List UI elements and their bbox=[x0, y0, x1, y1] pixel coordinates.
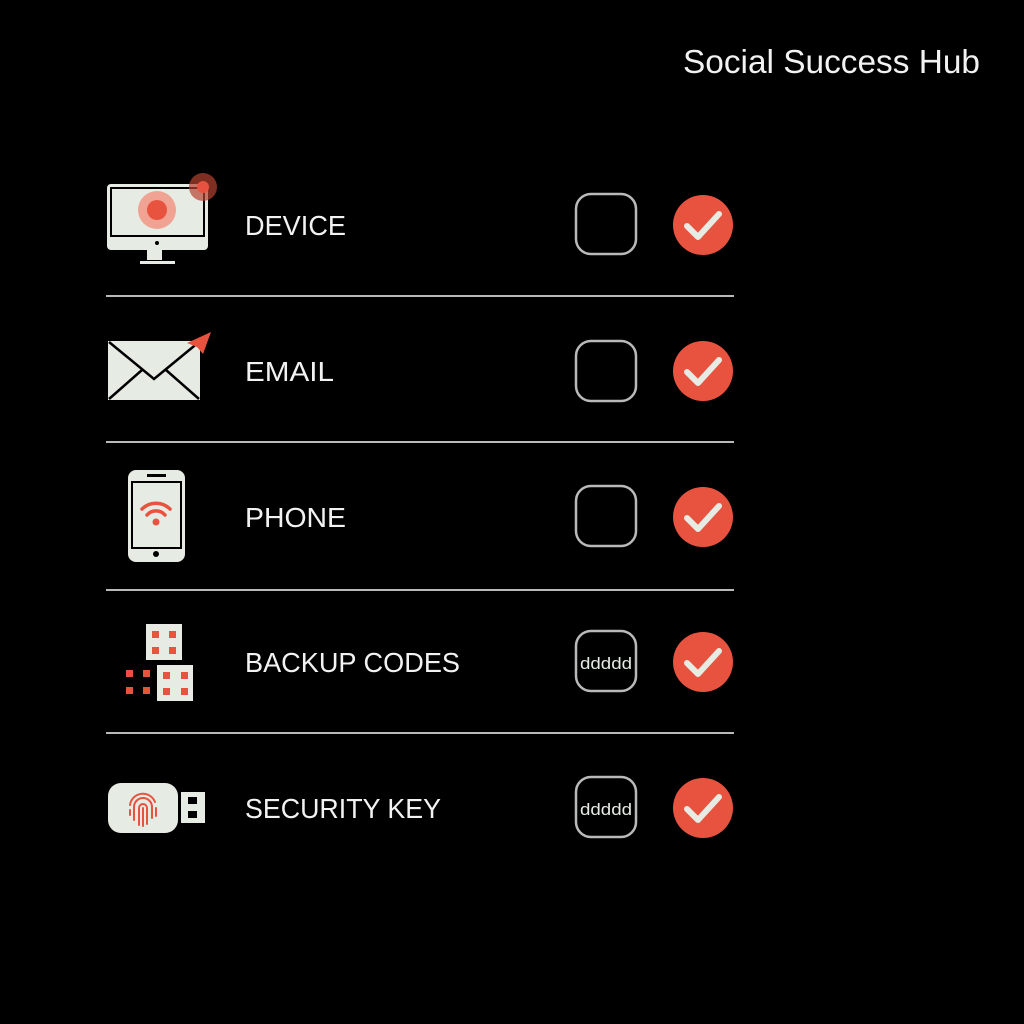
label: backup codes: BACKUP CODES bbox=[245, 647, 460, 678]
title: Social Success Hub bbox=[683, 43, 980, 80]
icon: usb key bbox=[108, 783, 205, 833]
checkbox: phone bbox=[576, 486, 636, 546]
icon: code blocks bbox=[126, 624, 193, 701]
checkbox: device bbox=[576, 194, 636, 254]
row: backup codes bbox=[126, 624, 733, 701]
row: email bbox=[108, 332, 733, 401]
check: backup codes bbox=[673, 632, 733, 692]
icon: phone bbox=[128, 470, 185, 562]
row: device bbox=[107, 173, 733, 264]
icon: monitor bbox=[107, 173, 217, 264]
label: device: DEVICE bbox=[245, 210, 346, 241]
check: phone bbox=[673, 487, 733, 547]
label: phone: PHONE bbox=[245, 502, 346, 533]
checkbox: security key: ddddd bbox=[580, 800, 632, 819]
check: device bbox=[673, 195, 733, 255]
label: security key: SECURITY KEY bbox=[245, 793, 441, 824]
label: email: EMAIL bbox=[245, 356, 334, 387]
checkbox: email bbox=[576, 341, 636, 401]
row: phone bbox=[128, 470, 733, 562]
check: security key bbox=[673, 778, 733, 838]
row: security key bbox=[108, 777, 733, 838]
icon: envelope bbox=[108, 332, 211, 400]
check: email bbox=[673, 341, 733, 401]
checkbox: backup codes: ddddd bbox=[580, 654, 632, 673]
checkbox: backup codes bbox=[576, 631, 636, 691]
checkbox: security key bbox=[576, 777, 636, 837]
